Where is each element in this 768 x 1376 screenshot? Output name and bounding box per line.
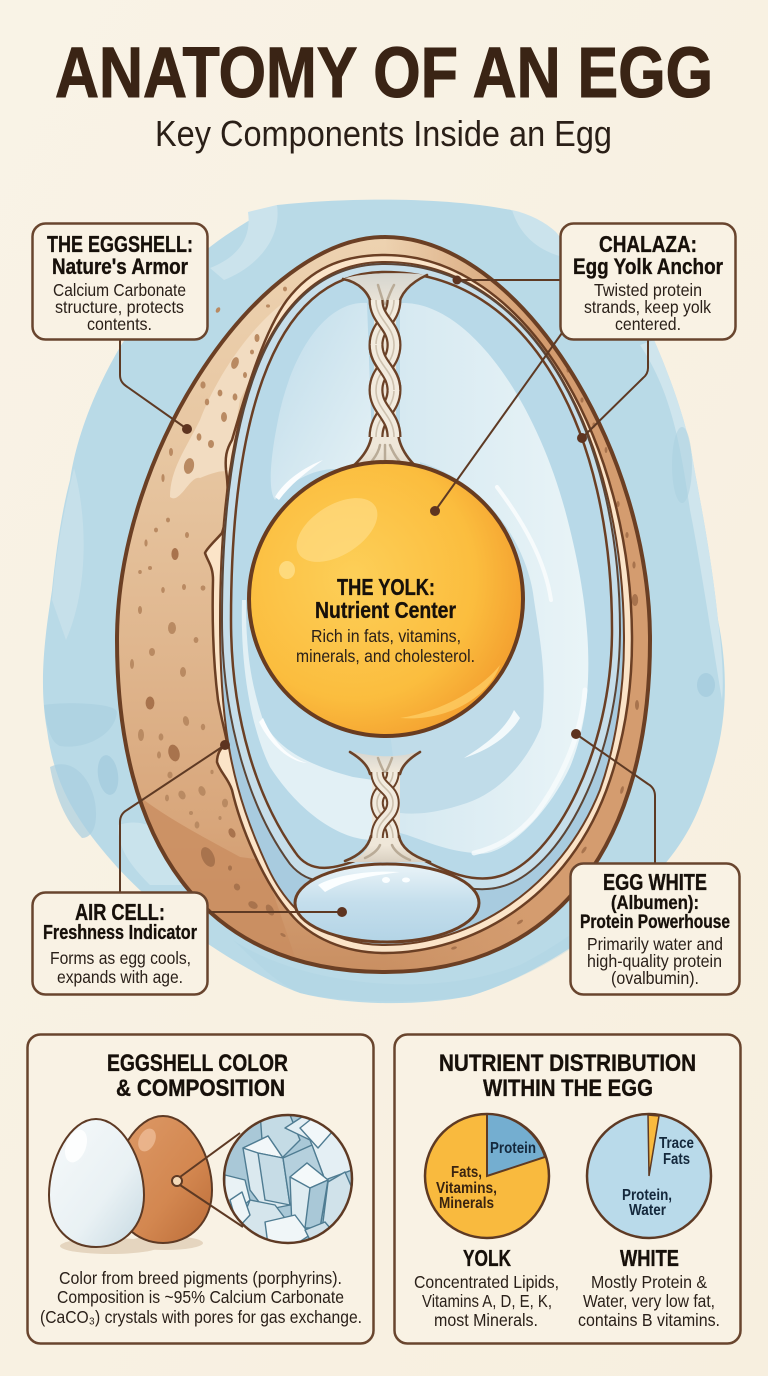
- yolk label: Nutrient Center: [315, 597, 456, 623]
- yolk column text: Concentrated Lipids,: [414, 1272, 559, 1292]
- panel heading: NUTRIENT DISTRIBUTION: [439, 1050, 696, 1077]
- pie chart: white: Fats: [663, 1151, 690, 1168]
- white column text: contains B vitamins.: [578, 1310, 720, 1330]
- callout: egg white: Protein Powerhouse: [580, 911, 730, 933]
- callout: egg white: [570, 864, 740, 994]
- white column text: [578, 1245, 720, 1330]
- callout: air cell: AIR CELL:: [75, 899, 165, 925]
- callout: chalaza: Twisted protein: [594, 280, 702, 300]
- upper chalaza: [338, 273, 432, 478]
- yolk label: minerals, and cholesterol.: [296, 646, 475, 666]
- speckles: [130, 287, 639, 950]
- white column text: Water, very low fat,: [583, 1291, 715, 1311]
- leader: air cell to shell: [120, 740, 230, 894]
- yolk column text: YOLK: [463, 1245, 511, 1271]
- lower left pale zone: [242, 600, 373, 840]
- pie chart: yolk: [425, 1114, 549, 1238]
- yolk: [249, 462, 523, 736]
- yolk column text: Vitamins A, D, E, K,: [422, 1291, 552, 1311]
- pie chart: yolk: Vitamins,: [436, 1180, 497, 1197]
- icon: white egg: [49, 1119, 144, 1247]
- composition text: Color from breed pigments (porphyrins).: [59, 1268, 342, 1288]
- pie chart: white: Protein,: [622, 1187, 672, 1204]
- callout: chalaza: [560, 224, 736, 340]
- white column text: Mostly Protein &: [591, 1272, 707, 1292]
- shell inner edge and cream band: [205, 255, 632, 953]
- air space line: [220, 262, 624, 945]
- pie chart: yolk: Fats,: [451, 1164, 482, 1181]
- leader: eggshell: [120, 338, 192, 434]
- yolk column text: most Minerals.: [434, 1310, 538, 1330]
- panel heading: WITHIN THE EGG: [483, 1075, 653, 1102]
- leader: egg white: [571, 729, 655, 865]
- callout: the eggshell: Calcium Carbonate: [53, 280, 186, 300]
- callout: egg white: (Albumen):: [611, 892, 699, 914]
- leader: chalaza to top: [452, 276, 562, 284]
- blue halo around the yolk: [386, 462, 544, 814]
- callout: chalaza: Egg Yolk Anchor: [573, 254, 723, 279]
- pie chart: white: Trace: [659, 1135, 694, 1152]
- panel: eggshell color and composition: [28, 1034, 374, 1344]
- callout: air cell: Freshness Indicator: [43, 922, 197, 944]
- icon: egg shadows: [60, 1236, 203, 1254]
- right pale zone: [400, 303, 588, 854]
- callout: air cell: [32, 892, 208, 994]
- panel heading: [107, 1050, 288, 1102]
- icon: magnifier lines: [172, 1133, 243, 1227]
- icon: calcium carbonate crystals: [224, 1112, 355, 1250]
- outer membrane: [222, 264, 620, 889]
- white column text: WHITE: [620, 1245, 679, 1271]
- panel heading: [439, 1050, 696, 1102]
- composition text: [40, 1268, 362, 1327]
- yolk label: Rich in fats, vitamins,: [311, 626, 461, 646]
- callout: the eggshell: structure, protects: [55, 297, 184, 317]
- lower chalaza: [345, 751, 430, 862]
- leader: yolk: [430, 333, 562, 516]
- callout: egg white: Primarily water and: [587, 934, 723, 954]
- pie chart: yolk: Minerals: [439, 1195, 494, 1212]
- subtitle: Key Components Inside an Egg: [155, 113, 612, 154]
- pie chart: white: Water: [629, 1202, 666, 1219]
- callout: egg white: (ovalbumin).: [611, 968, 699, 988]
- pie chart: white: [587, 1114, 711, 1238]
- eggshell outer layer: [117, 230, 665, 980]
- panel: nutrient distribution: [394, 1034, 740, 1344]
- callout: the eggshell: Nature's Armor: [52, 254, 188, 279]
- air cell: [295, 864, 479, 942]
- egg cross-section: [117, 230, 665, 980]
- callout: egg white: EGG WHITE: [603, 869, 707, 895]
- egg white: albumen: [231, 272, 612, 879]
- upper left pale zone: [271, 303, 373, 500]
- leader: air cell: [206, 907, 347, 917]
- composition text: Composition is ~95% Calcium Carbonate: [57, 1287, 344, 1307]
- background: pale blue blob: [43, 200, 725, 1003]
- callout: the eggshell: contents.: [87, 314, 152, 334]
- composition text: (CaCO₃) crystals with pores for gas exchange.: [40, 1307, 362, 1327]
- pie chart: yolk: Protein: [490, 1140, 536, 1157]
- callout: the eggshell: THE EGGSHELL:: [47, 231, 193, 257]
- callout: chalaza: centered.: [615, 314, 681, 334]
- callout: air cell: expands with age.: [57, 967, 183, 987]
- leader: chalaza to membrane: [577, 338, 648, 443]
- panel heading: & COMPOSITION: [116, 1075, 285, 1102]
- callout: egg white: high-quality protein: [587, 951, 722, 971]
- yolk column text: [414, 1245, 559, 1330]
- callout: chalaza: CHALAZA:: [599, 231, 697, 257]
- icon: brown egg: [114, 1116, 212, 1243]
- callout: air cell: Forms as egg cools,: [50, 948, 191, 968]
- panel heading: EGGSHELL COLOR: [107, 1050, 288, 1077]
- callout: chalaza: strands, keep yolk: [584, 297, 711, 317]
- callout: the eggshell: [32, 224, 208, 340]
- yolk label: [296, 574, 475, 666]
- yolk label: THE YOLK:: [337, 574, 435, 600]
